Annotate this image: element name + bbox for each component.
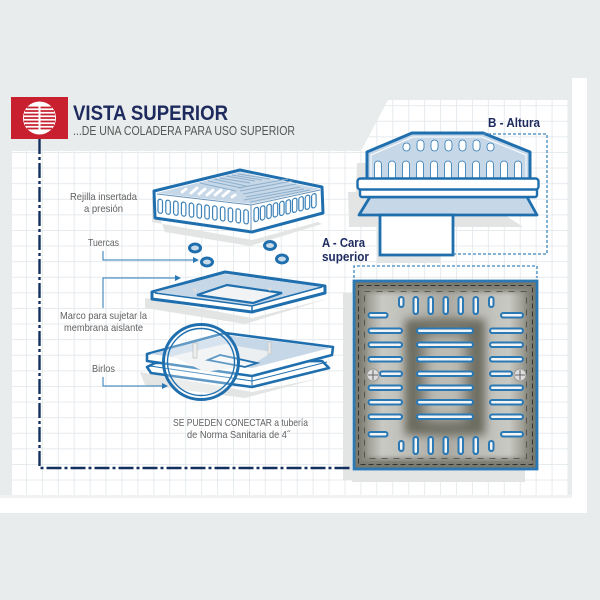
- grate isometric: [154, 170, 323, 232]
- side view drawing: [358, 133, 538, 255]
- plan view grate: [353, 280, 538, 470]
- label: marco: [60, 310, 147, 334]
- base with studs: [147, 333, 333, 387]
- magnifier circle: [164, 324, 238, 400]
- note: conexion: de Norma Sanitaria de 4˝: [187, 429, 291, 441]
- label: tuercas: Tuercas: [88, 237, 119, 249]
- top slots: [403, 140, 494, 151]
- label: marco: Marco para sujetar la: [60, 310, 147, 322]
- screws: [367, 369, 526, 381]
- logo: [11, 97, 68, 139]
- note: conexion: SE PUEDEN CONECTAR a tubería: [173, 417, 308, 429]
- heading: A - Cara superior: A - Cara: [322, 236, 366, 250]
- label: birlos: Birlos: [92, 363, 115, 375]
- dimension: cara: [354, 266, 537, 278]
- arrow: tuercas: [103, 251, 198, 260]
- title: VISTA SUPERIOR: [73, 102, 228, 125]
- heading: A - Cara superior: [322, 236, 369, 264]
- nuts: [190, 242, 288, 266]
- lower slots: [374, 161, 522, 183]
- heading: A - Cara superior: superior: [322, 250, 369, 264]
- subtitle: ...DE UNA COLADERA PARA USO SUPERIOR: [73, 123, 295, 138]
- label: rejilla: a presión: [84, 203, 123, 215]
- grid panel: [12, 100, 568, 495]
- label: rejilla: [70, 191, 137, 215]
- frame: [152, 272, 325, 312]
- white outer strips: [0, 78, 587, 513]
- note: conexion: [173, 417, 308, 441]
- label: marco: membrana aislante: [64, 322, 143, 334]
- label: rejilla: Rejilla insertada: [70, 191, 137, 203]
- heading: B - Altura: B - Altura: [488, 116, 541, 130]
- dash-dot frame line: [40, 139, 352, 468]
- arrow: birlos: [103, 377, 167, 386]
- drop shadows: [140, 163, 525, 482]
- slots: [368, 297, 523, 454]
- dimension: altura: [453, 134, 547, 254]
- arrow: marco: [103, 278, 180, 308]
